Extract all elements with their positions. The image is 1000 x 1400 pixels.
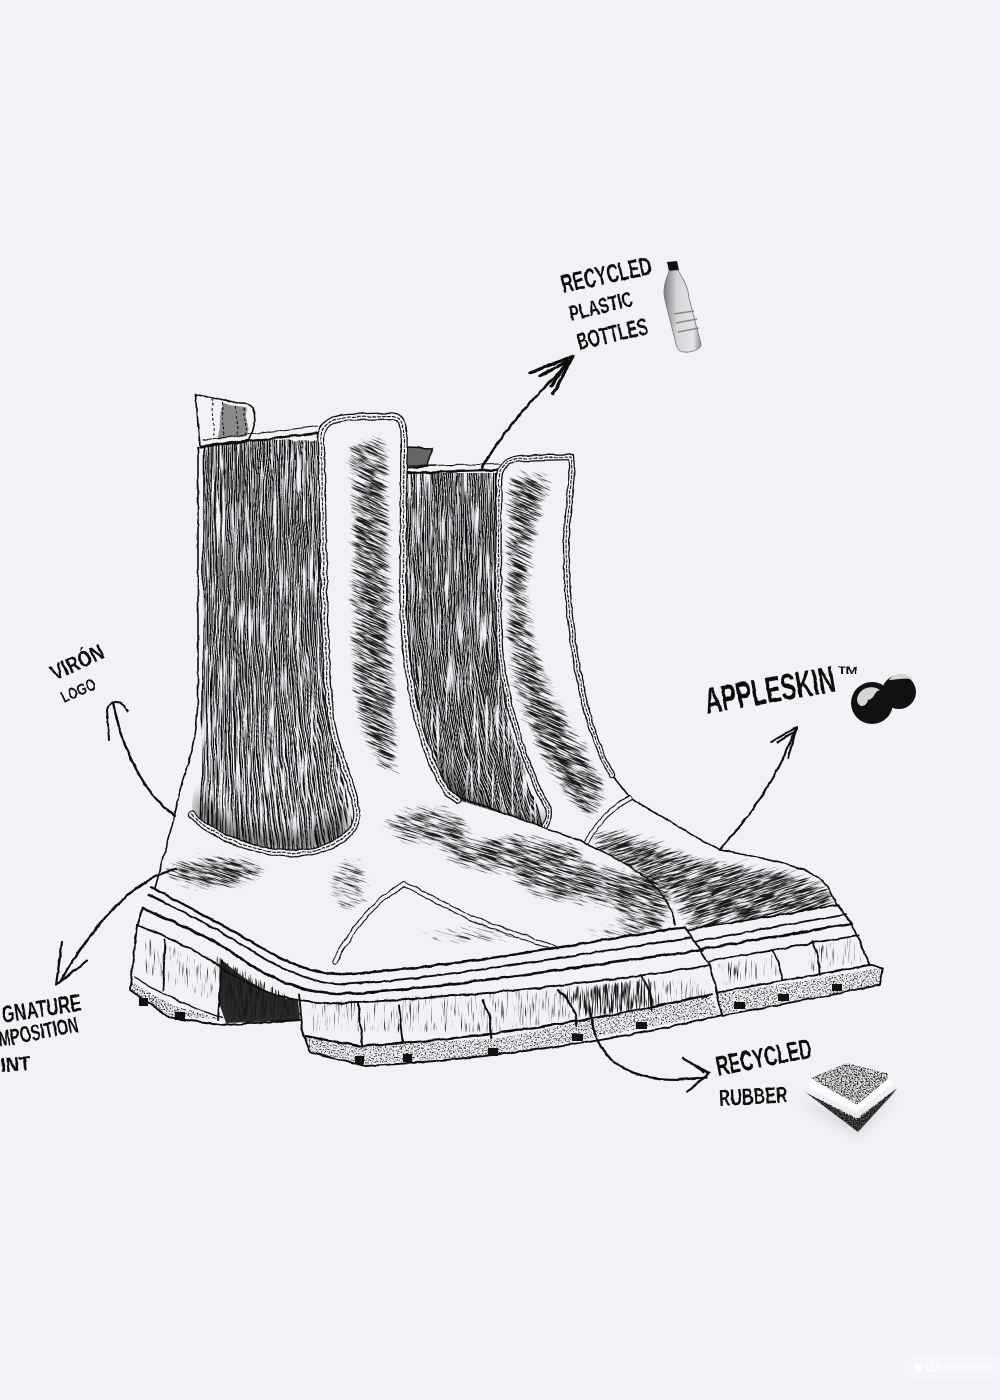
- label text: [0, 990, 83, 1077]
- watermark label: ◙ Шопоголик: [914, 1359, 994, 1374]
- pull tab: [196, 394, 255, 446]
- annotation: appleskin: [701, 659, 916, 849]
- heel arch shadow: [218, 960, 300, 1023]
- rear sole lines: [688, 905, 883, 1016]
- label text: INT: [0, 1053, 31, 1077]
- tread strips: [132, 982, 720, 1064]
- arrow to recycled rubber: [591, 1014, 709, 1092]
- rear boot shaft shading: [362, 423, 753, 874]
- boot silhouette fill: [150, 416, 680, 978]
- arrow to recycled plastic bottles: [482, 356, 573, 467]
- label text: [558, 250, 654, 356]
- annotation: signature composition print: [0, 869, 176, 1077]
- arrow to signature composition print: [56, 869, 176, 985]
- rear tread lugs: [734, 984, 842, 1009]
- label text: BOTTLES: [574, 313, 651, 356]
- label text: [713, 1033, 814, 1111]
- icon: apples: [851, 674, 916, 724]
- label text: PLASTIC: [567, 288, 635, 326]
- label text: [47, 639, 108, 707]
- rear boot elastic panel: [406, 473, 546, 826]
- watermark: [905, 1354, 1000, 1378]
- rear boot outline: [404, 457, 838, 908]
- infographic canvas: [0, 258, 994, 1371]
- front boot shaft shading: [209, 407, 541, 808]
- label text: [701, 659, 857, 722]
- right boot (rear): [406, 446, 884, 1017]
- annotation: virón logo: [47, 639, 175, 816]
- icon: plastic bottle: [664, 261, 701, 352]
- sole block hatching: [140, 930, 712, 1035]
- icon: rubber layers: [795, 1063, 900, 1135]
- watermark pill: [905, 1354, 1000, 1378]
- front boot elastic panel: [192, 439, 353, 850]
- label text: VIRÓN: [47, 639, 108, 686]
- sole lines: [130, 887, 722, 1066]
- annotation: recycled rubber: [591, 1014, 900, 1135]
- front boot toe and heel shading: [114, 648, 721, 1102]
- sole fill: [130, 888, 722, 1066]
- rear sole fill: [688, 905, 883, 1016]
- rear tread strip: [716, 968, 880, 1014]
- arrow to virón logo: [107, 702, 175, 816]
- rear sole hatching: [712, 930, 866, 990]
- label text: RECYCLED: [713, 1033, 814, 1082]
- label text: RECYCLED: [558, 250, 654, 299]
- label text: TM: [838, 665, 857, 677]
- label text: APPLESKIN: [701, 659, 838, 722]
- label text: GNATURE: [0, 990, 83, 1029]
- rear boot sole: [688, 905, 883, 1016]
- label text: LOGO: [59, 676, 99, 707]
- rear boot pull tab: [406, 447, 432, 468]
- front boot sole: [130, 887, 722, 1066]
- left boot (front): [114, 394, 722, 1102]
- annotation: recycled plastic bottles: [482, 250, 701, 467]
- rear boot toe shading: [556, 752, 874, 1013]
- front boot outline and stitching: [155, 416, 675, 962]
- tread lugs: [139, 998, 647, 1064]
- illustration: pair of chelsea boots: [114, 394, 883, 1102]
- label text: RUBBER: [718, 1081, 788, 1111]
- arrow to appleskin: [720, 727, 797, 849]
